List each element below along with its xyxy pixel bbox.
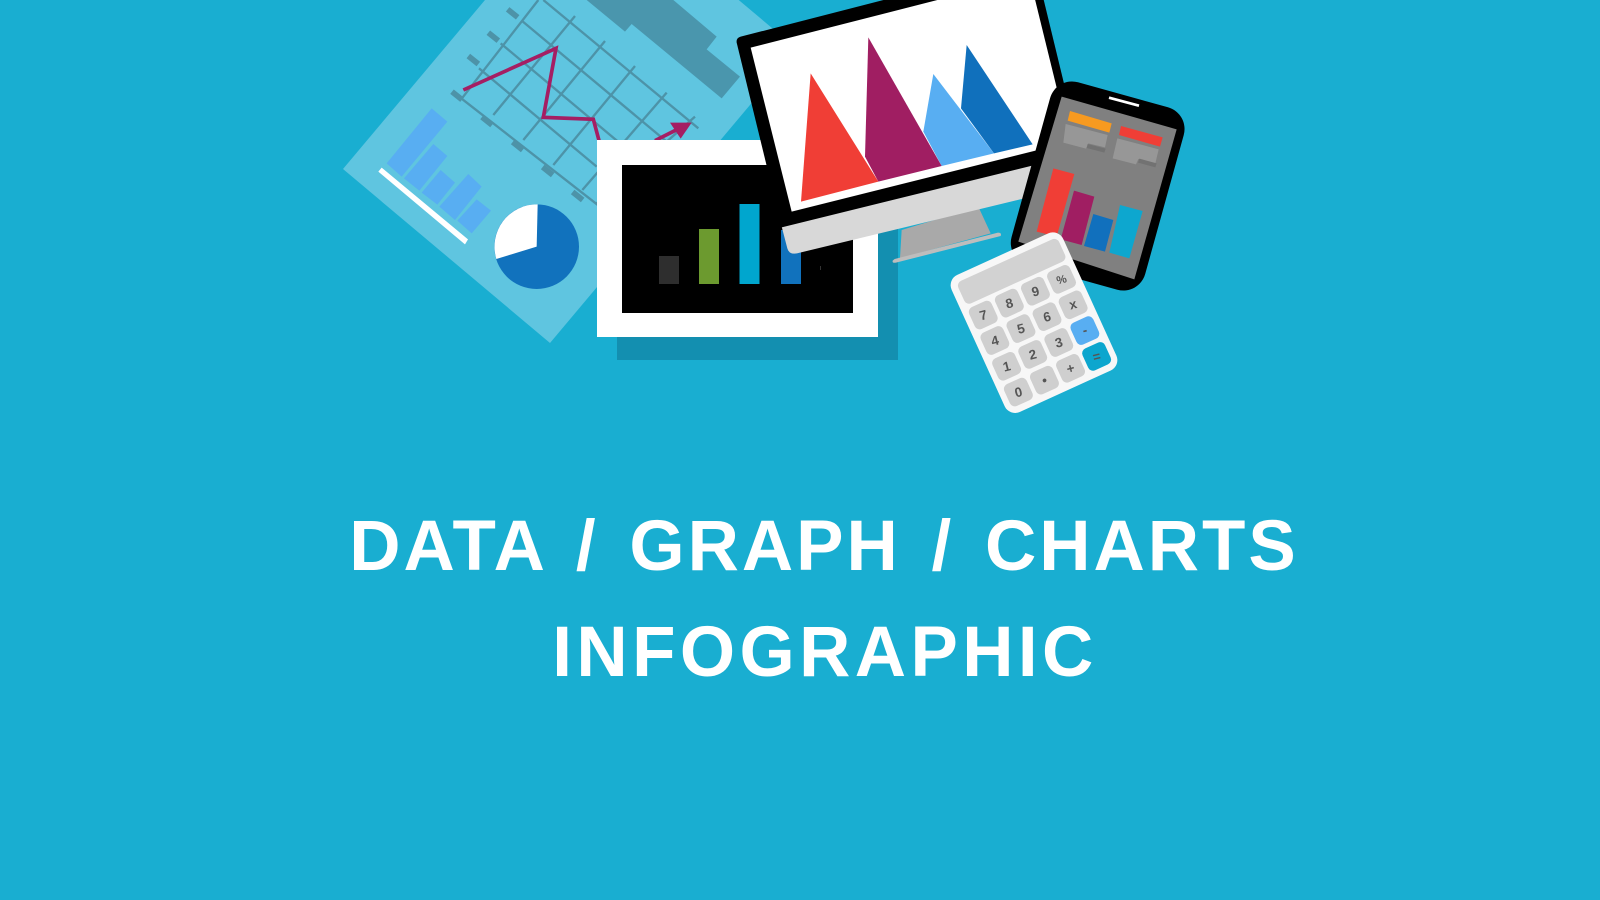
calculator key labels: % [1055,273,1068,287]
small bar chart on paper [387,108,491,233]
phone bar chart [1037,168,1143,258]
calculator display [956,237,1067,305]
panel: framed bar chart [597,140,898,360]
calculator key labels: 2 [1027,346,1038,363]
calculator key labels: 7 [978,307,989,323]
bars in frame [659,204,821,284]
calculator key labels: = [1091,348,1103,365]
phone widget left [1063,111,1112,153]
phone [1006,76,1190,296]
phone widget right [1113,126,1163,167]
calculator key labels [975,270,1105,402]
phone screen [1018,97,1177,279]
phone speaker [1109,98,1139,106]
monitor stand [900,207,991,258]
calculator key labels: 6 [1042,309,1053,325]
calculator key labels: 3 [1053,334,1064,351]
triangle chart [801,37,1033,202]
calculator [947,229,1121,417]
calculator key labels: 9 [1030,283,1041,300]
title [349,507,1299,692]
monitor body [737,0,1081,227]
panel: paper report sheet [343,0,797,343]
monitor screen [751,0,1070,212]
calculator key labels: 4 [989,332,1001,349]
line chart grid [452,0,698,207]
title: DATA / GRAPH / CHARTS [349,507,1299,586]
dark header block on paper [587,0,740,98]
calculator key labels: 8 [1004,295,1015,311]
calculator key labels: + [1065,360,1076,377]
calculator key labels: 5 [1016,320,1027,337]
calculator key labels: 0 [1013,384,1024,400]
monitor chin [782,163,1040,254]
calculator key labels: x [1068,296,1079,313]
monitor [737,0,1081,263]
calculator keys [967,263,1113,408]
title: INFOGRAPHIC [552,613,1098,692]
pie chart [494,204,579,289]
white baseline of bar chart [378,168,468,244]
calculator key labels: • [1040,372,1049,388]
line chart trend with arrow [463,48,692,147]
calculator key labels: 1 [1001,358,1013,375]
calculator key labels: - [1081,322,1089,338]
